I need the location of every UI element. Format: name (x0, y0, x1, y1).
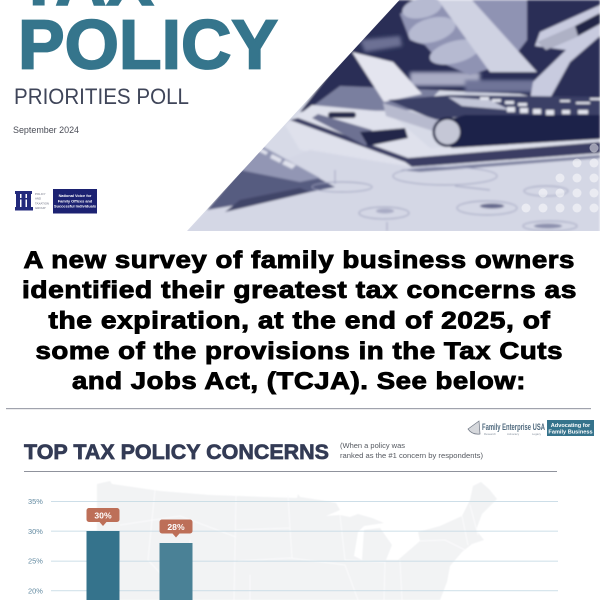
header title block (13, 0, 278, 135)
bar chart (28, 481, 558, 600)
clipboard paper (302, 103, 532, 157)
axis labels (28, 497, 43, 596)
logo badge: national voice: National Voice for (59, 193, 92, 198)
decorative dots (522, 144, 598, 212)
intro paragraph (22, 247, 577, 395)
bar: 30%: 30% (94, 510, 112, 520)
lower paper (415, 165, 416, 166)
receipt in hand (438, 0, 537, 72)
intro paragraph: A new survey of family business owners (24, 247, 575, 274)
logo text: group name: AND (35, 196, 41, 200)
blurred desk objects (305, 86, 440, 112)
subtitle: priorities poll: PRIORITIES POLL (14, 84, 189, 109)
calculator silver end (383, 103, 438, 132)
logo: Family Enterprise USA: Research (484, 432, 496, 436)
axis labels: 25% (28, 556, 43, 566)
background US map (97, 481, 497, 600)
logo text: group name: POLICY (35, 192, 46, 196)
bar: 28%: 28% (167, 522, 185, 532)
pen (574, 12, 600, 37)
logo text: group name: TAXATION (35, 202, 49, 206)
logo text: group name: GROUP (35, 206, 46, 210)
intro paragraph: and Jobs Act, (TCJA). See below: (72, 368, 526, 395)
axis labels: 20% (28, 586, 43, 596)
logo badge: advocating for family business: Advocating for (551, 423, 591, 429)
logo badge: advocating for family business (547, 420, 594, 436)
calculator top and keys (388, 95, 600, 120)
intro paragraph: identified their greatest tax concerns as (22, 277, 577, 304)
bar: 30% (86, 508, 120, 600)
logo badge: national voice: Family Offices and (58, 198, 93, 204)
logo: Family Enterprise USA (468, 420, 594, 436)
intro paragraph: the expiration, at the end of 2025, of (48, 308, 551, 334)
hero photo: hands on calculator, navy duotone (180, 0, 600, 235)
keyboard wedge (207, 169, 335, 211)
chart heading (24, 440, 483, 464)
hand holding receipt (400, 0, 527, 75)
logo badge: national voice (53, 189, 97, 214)
heading note: ranked as the #1 concern by respondents) (340, 451, 483, 460)
diagram circles on paper (312, 167, 577, 231)
logo text: Family Enterprise USA (482, 422, 545, 432)
clipboard clip (312, 114, 372, 146)
heading note: (When a policy was (340, 441, 405, 450)
logo: Policy and Taxation Group (15, 189, 97, 214)
icon: building emblem (15, 191, 33, 210)
gridlines (51, 501, 558, 591)
clipboard edge (290, 118, 600, 167)
calculator body (438, 115, 600, 148)
logo text: group name (35, 192, 49, 210)
logo badge: national voice: Successful Individuals (54, 204, 96, 208)
date: September 2024 (13, 124, 79, 135)
title: POLICY: POLICY (18, 6, 278, 84)
logo badge: advocating for family business: Family Business (548, 430, 593, 436)
intro paragraph: some of the provisions in the Tax Cuts (36, 338, 563, 365)
icon: swoosh emblem (468, 421, 480, 434)
logo: Family Enterprise USA: Advocacy (507, 432, 520, 436)
logo: Family Enterprise USA: Legacy (532, 432, 542, 436)
photo background (187, 75, 600, 231)
bar: 28% (160, 520, 192, 600)
curled receipt (352, 52, 422, 102)
pointing finger (530, 5, 600, 102)
heading note (340, 441, 483, 460)
heading text: TOP TAX POLICY CONCERNS (24, 440, 329, 464)
axis labels: 30% (28, 527, 43, 536)
axis labels: 35% (28, 497, 43, 506)
